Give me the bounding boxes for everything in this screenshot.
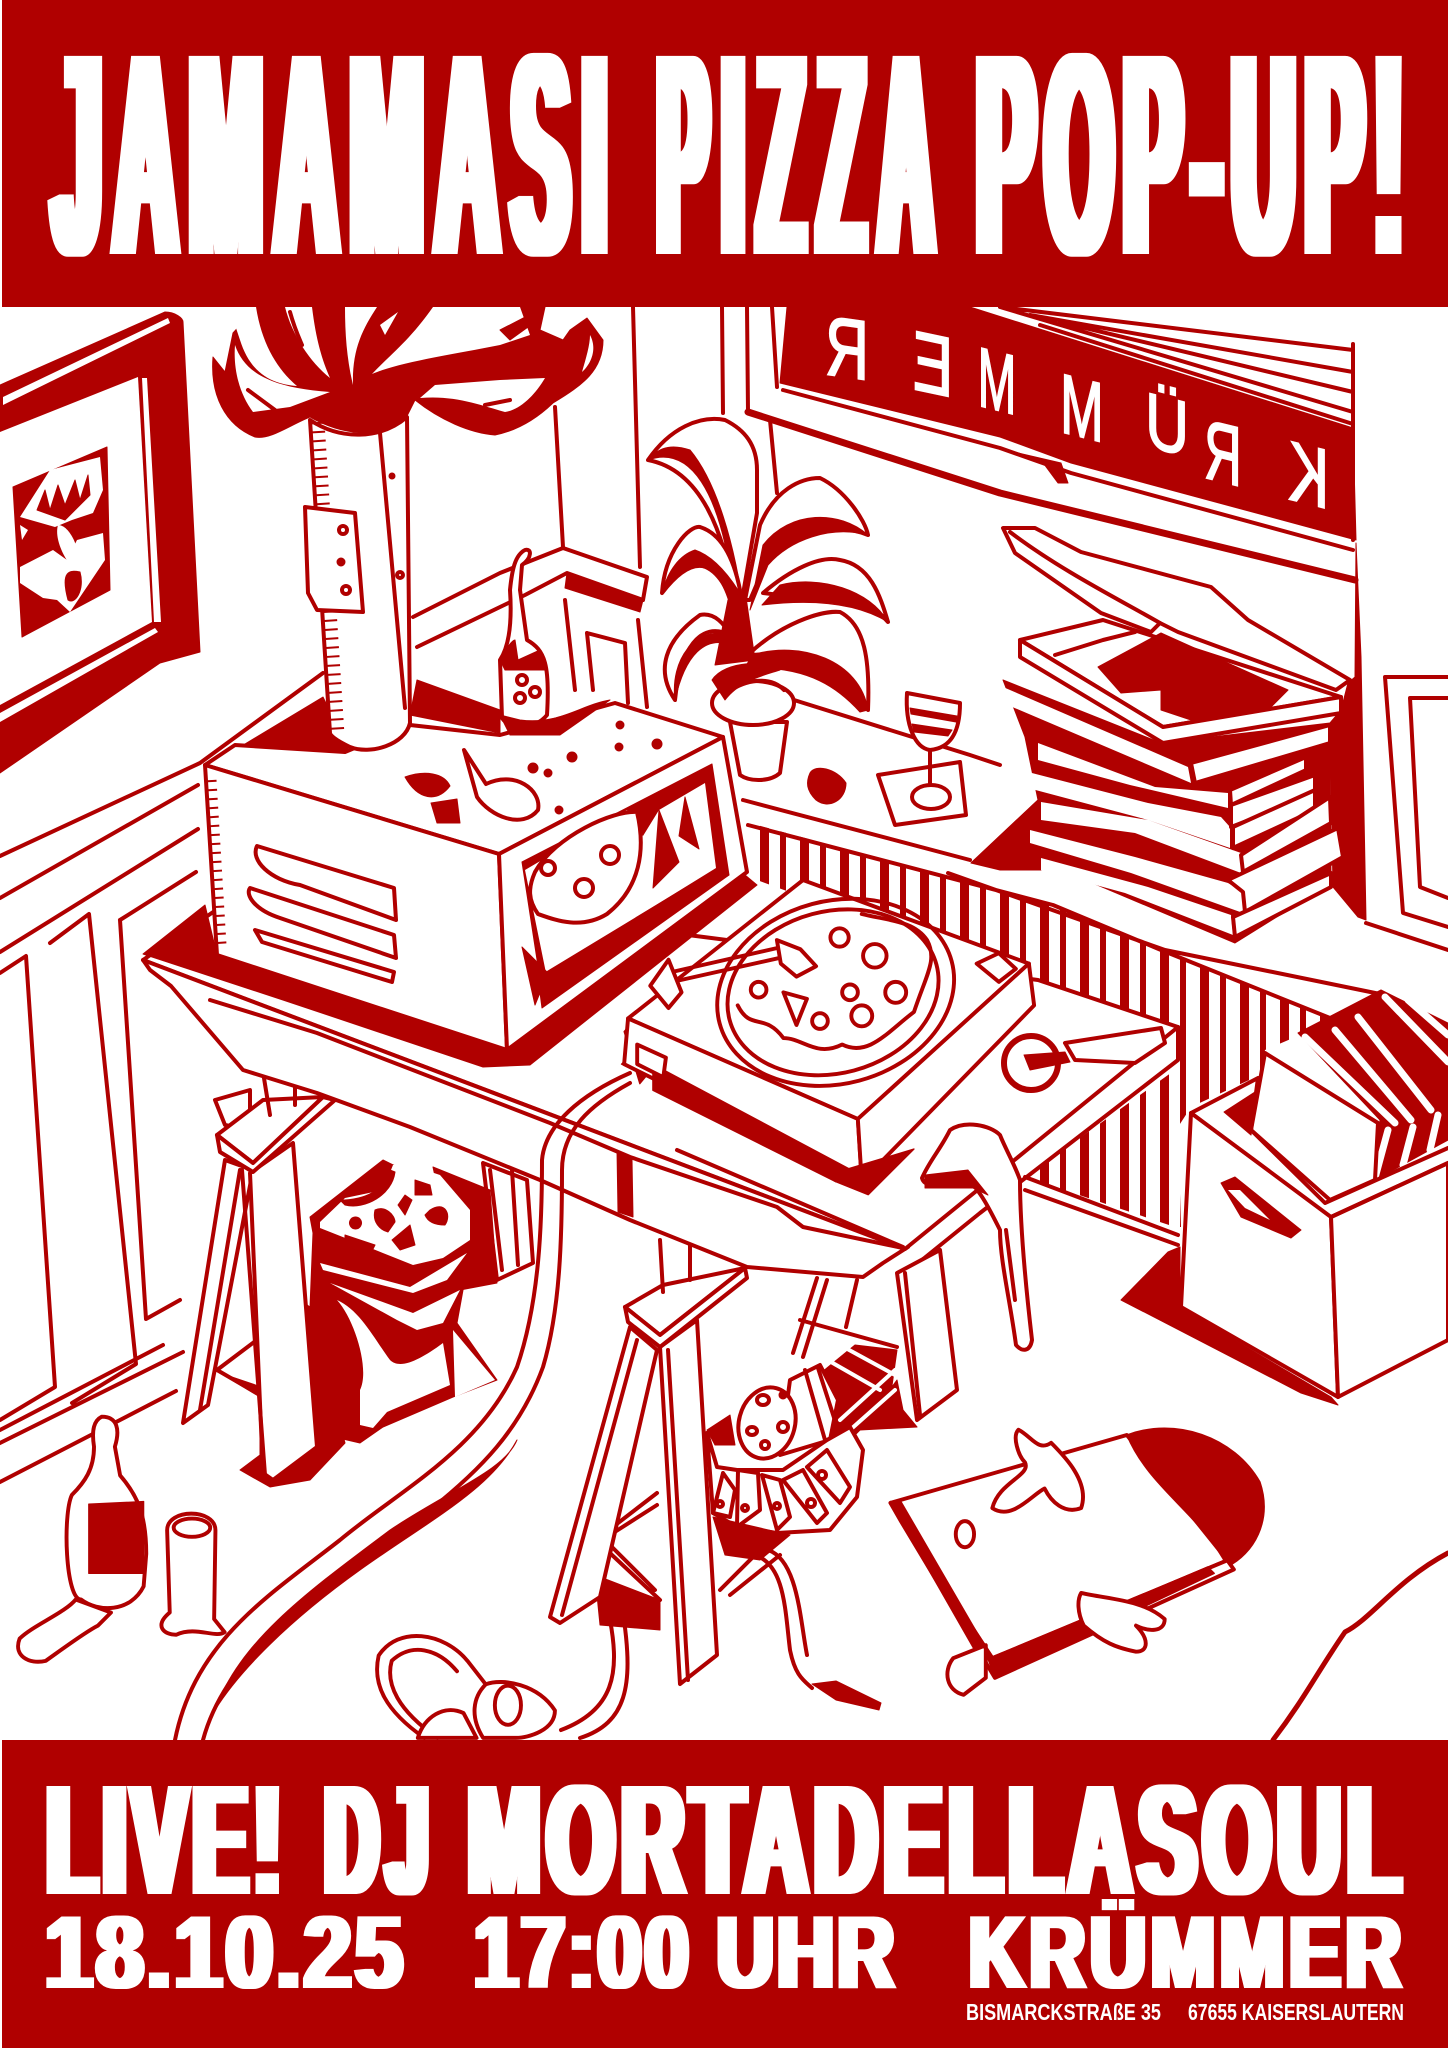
strap around table — [617, 1150, 633, 1217]
vent slots — [249, 846, 396, 982]
pizza box on floor — [890, 1428, 1264, 1695]
window with mirrored sign — [748, 298, 1356, 580]
mirrored KRÜMMER lettering: R — [825, 298, 869, 398]
date, time and venue — [45, 1893, 1401, 2011]
mortadella slices — [713, 1450, 850, 1530]
sausage ruff — [707, 1427, 863, 1533]
oven — [205, 697, 747, 1050]
trestle one back parts and shadows — [215, 1090, 533, 1487]
bottom hand — [1078, 1593, 1165, 1652]
mirrored KRÜMMER lettering — [825, 298, 1329, 527]
table top — [143, 875, 1178, 1277]
pot — [730, 722, 787, 780]
title: POP-UP! — [977, 0, 1403, 316]
wall frame at right — [1366, 677, 1448, 950]
address: BISMARCKSTRAßE 35 — [966, 1999, 1161, 2025]
carpet edge — [1273, 1553, 1448, 1740]
flames on stove pipe — [213, 307, 603, 437]
address — [966, 1999, 1404, 2025]
cardboard record crate — [1121, 990, 1448, 1405]
turntable knob — [977, 953, 1016, 982]
tonearm — [650, 940, 816, 1008]
stove pipe — [305, 417, 410, 750]
sauce bottle on oven — [500, 550, 610, 735]
pizza peel — [1003, 528, 1350, 690]
title: JAMAMASI — [53, 0, 607, 316]
top hand — [992, 1430, 1083, 1512]
date, time and venue: 17:00 UHR — [474, 1893, 894, 2011]
top open sleeve — [1020, 620, 1341, 727]
garlic and crumbs — [405, 721, 662, 823]
mirrored KRÜMMER lettering: K — [1289, 423, 1329, 527]
illustration: pizza party room — [0, 298, 1448, 1740]
plant leaves — [648, 419, 888, 712]
framed picture — [0, 312, 200, 773]
jack and headphone cables — [561, 1550, 881, 1738]
headliner — [47, 1751, 1400, 1928]
trestle two — [550, 1240, 957, 1684]
picture artwork — [13, 447, 110, 637]
lower shelf — [596, 1320, 897, 1600]
mortadella — [707, 1345, 897, 1560]
bottom banner — [2, 1740, 1448, 2048]
mirrored KRÜMMER lettering: M — [978, 330, 1016, 433]
headliner: MORTADELLASOUL — [468, 1751, 1400, 1927]
wall lines and wainscot — [0, 307, 777, 1482]
trestle one front legs — [183, 1072, 335, 1480]
mirrored KRÜMMER lettering: R — [1204, 401, 1242, 505]
title: PIZZA — [658, 0, 933, 316]
mirrored KRÜMMER lettering: Ü — [1145, 375, 1189, 473]
headliner: LIVE! — [47, 1752, 281, 1928]
cheese drip on table edge — [922, 1125, 1032, 1350]
potted plant — [648, 419, 888, 780]
melted lasagne stack — [310, 1160, 497, 1443]
record platter — [696, 873, 975, 1112]
right faces — [1191, 725, 1330, 783]
cable to floor — [175, 1073, 630, 1740]
record stack — [971, 543, 1366, 943]
pizza on platter — [709, 886, 957, 1098]
wine glass on coaster — [808, 693, 966, 825]
headphones — [377, 1636, 555, 1738]
headliner: DJ — [325, 1752, 428, 1927]
pizza cutter — [1004, 1028, 1165, 1090]
bottle on floor — [18, 1417, 146, 1662]
date, time and venue: 18.10.25 — [45, 1895, 403, 2011]
turntable — [622, 873, 1034, 1195]
mirrored KRÜMMER lettering: M — [1060, 355, 1104, 460]
top banner — [2, 0, 1448, 316]
glass on floor — [161, 1514, 225, 1635]
oven window and pizza — [522, 764, 729, 1008]
radiator and window sill — [743, 700, 1448, 1245]
connector — [637, 1045, 666, 1077]
left faces — [1003, 687, 1243, 935]
title — [53, 0, 1403, 316]
mirrored KRÜMMER lettering: E — [913, 312, 953, 416]
date, time and venue: KRÜMMER — [969, 1895, 1401, 2011]
